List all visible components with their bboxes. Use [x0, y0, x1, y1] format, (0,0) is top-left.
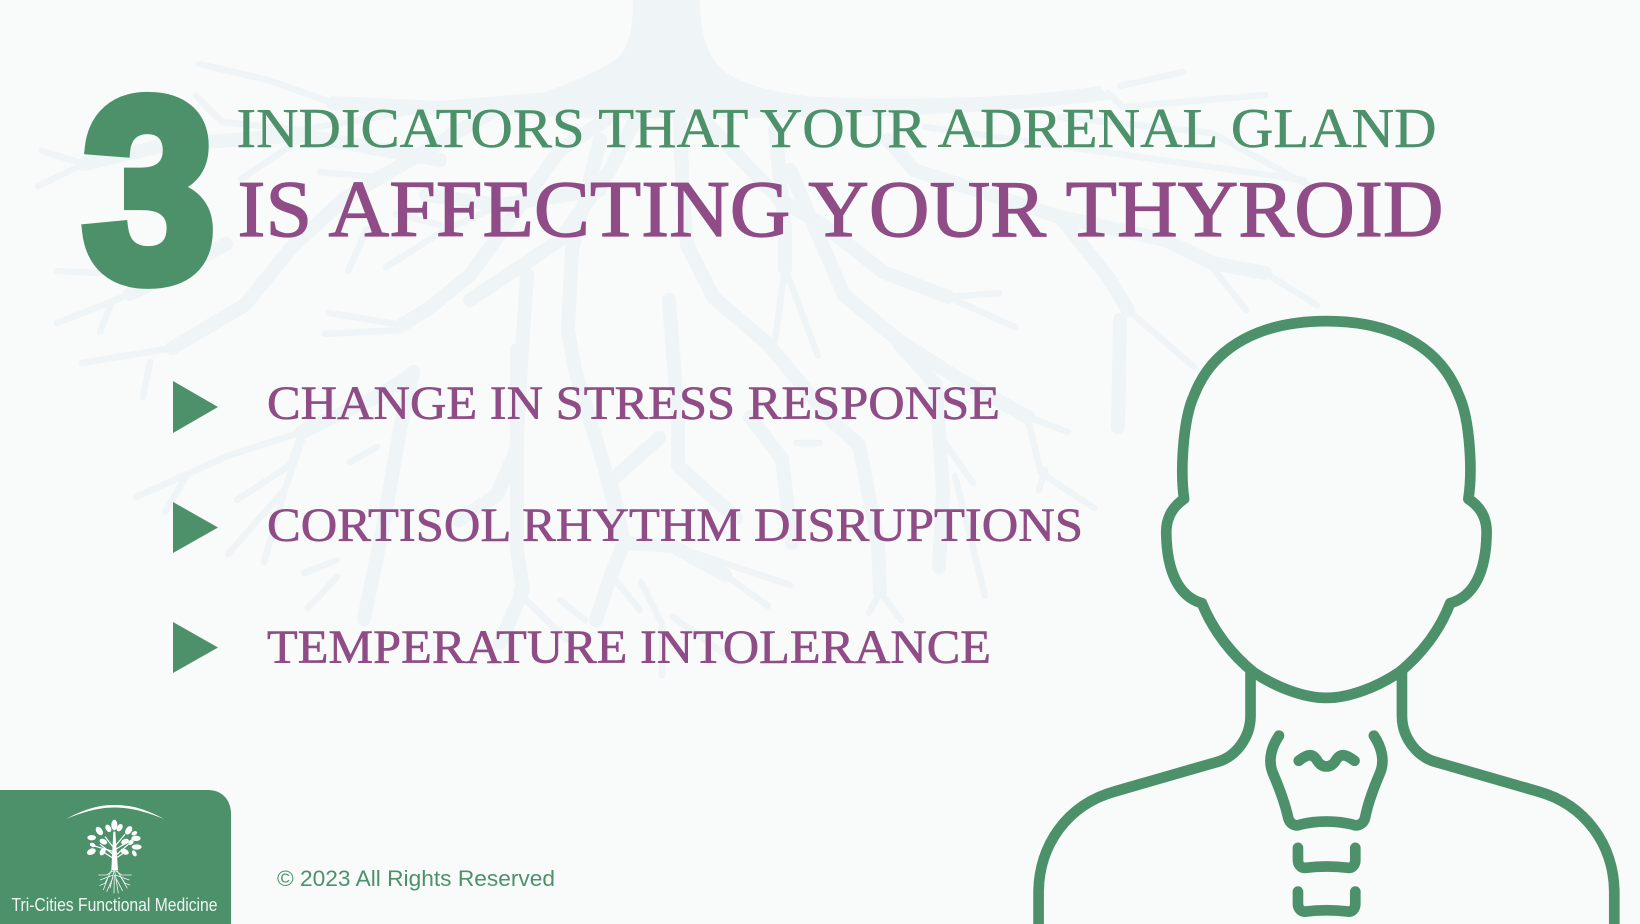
head outline [1166, 321, 1487, 698]
neck and left shoulder [1039, 670, 1251, 924]
thyroid gland squiggle [1299, 755, 1355, 766]
icon: bullet triangle [173, 622, 218, 673]
copyright text: © 2023 All Rights Reserved [277, 866, 555, 891]
heading line 2: IS AFFECTING YOUR THYROID [238, 164, 1444, 254]
title block [83, 46, 1444, 334]
indicator text: CORTISOL RHYTHM DISRUPTIONS [267, 499, 1083, 552]
neck and right shoulder [1402, 670, 1614, 924]
indicator 1 [173, 377, 1000, 433]
big number 3: 3 [83, 46, 215, 334]
background: faded tree roots [38, 0, 1317, 676]
icon: person outline with thyroid [1039, 321, 1614, 924]
icon: bullet triangle [173, 502, 218, 553]
thyroid cartilage [1270, 736, 1382, 825]
trachea ring 2 [1298, 892, 1355, 912]
indicator list [173, 377, 1083, 674]
indicator 2 [173, 499, 1083, 553]
icon: logo tree [86, 820, 142, 893]
heading line 1: INDICATORS THAT YOUR ADRENAL GLAND [236, 98, 1436, 160]
indicator text: CHANGE IN STRESS RESPONSE [267, 377, 1000, 430]
logo wordmark: Tri-Cities Functional Medicine [12, 895, 218, 915]
panel: logo [0, 790, 231, 924]
indicator text: TEMPERATURE INTOLERANCE [267, 621, 991, 674]
trachea ring 1 [1298, 848, 1355, 868]
logo background [0, 790, 231, 924]
icon: logo arc [66, 805, 164, 819]
icon: bullet triangle [173, 381, 218, 433]
indicator 3 [173, 621, 991, 674]
